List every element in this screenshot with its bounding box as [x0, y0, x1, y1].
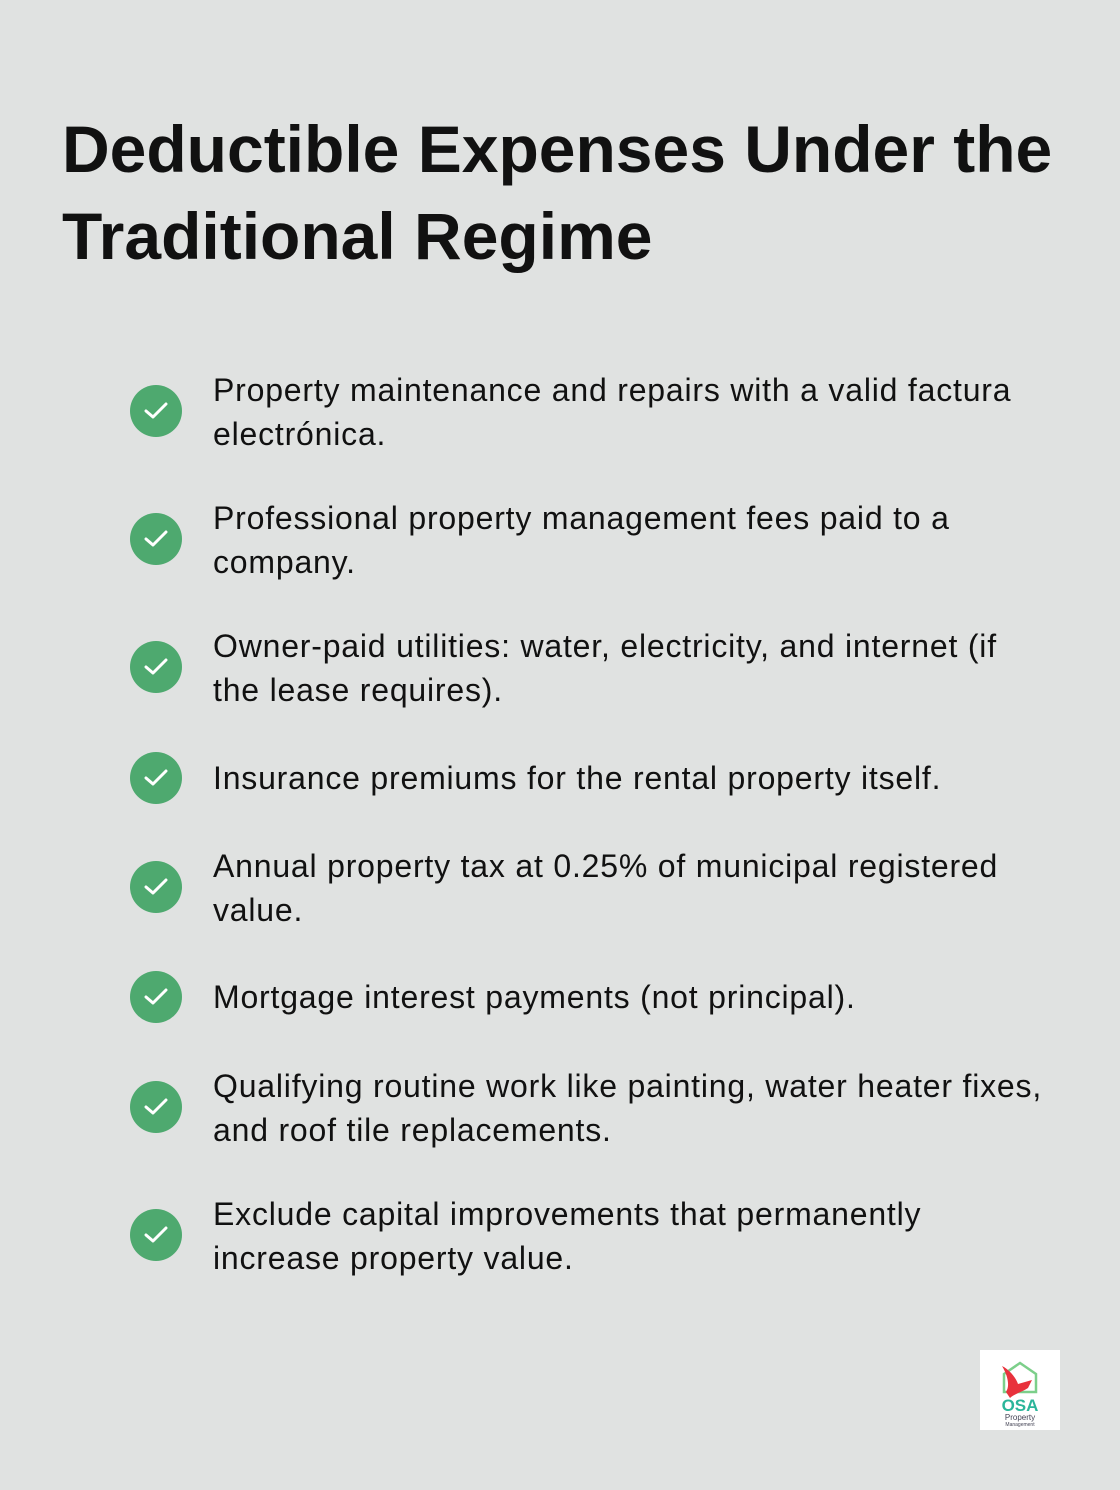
icon: check	[130, 752, 182, 804]
text	[213, 500, 950, 580]
item 6	[130, 971, 856, 1023]
text: Insurance premiums for the rental property itself.	[213, 760, 941, 796]
text: Property maintenance and repairs with a valid factura	[213, 372, 1011, 408]
icon: check	[130, 1081, 182, 1133]
icon: check	[130, 971, 182, 1023]
icon: check	[130, 513, 182, 565]
item 2	[130, 500, 950, 580]
text: and roof tile replacements.	[213, 1112, 612, 1148]
text	[213, 848, 998, 928]
logo: OSA	[1002, 1396, 1038, 1415]
item 8	[130, 1196, 921, 1276]
text	[213, 1068, 1042, 1148]
logo	[980, 1350, 1060, 1430]
item 3	[130, 628, 997, 708]
icon: check	[130, 861, 182, 913]
text: Qualifying routine work like painting, water heater fixes,	[213, 1068, 1042, 1104]
text: electrónica.	[213, 416, 386, 452]
text: the lease requires).	[213, 672, 503, 708]
text: increase property value.	[213, 1240, 574, 1276]
text: Mortgage interest payments (not principal).	[213, 979, 856, 1015]
text	[213, 1196, 921, 1276]
title: Traditional Regime	[62, 199, 652, 273]
text	[213, 372, 1011, 452]
text: Professional property management fees paid to a	[213, 500, 950, 536]
text: Owner-paid utilities: water, electricity, and internet (if	[213, 628, 997, 664]
item 7	[130, 1068, 1042, 1148]
item 1	[130, 372, 1011, 452]
text: value.	[213, 892, 303, 928]
item 5	[130, 848, 998, 928]
text: Annual property tax at 0.25% of municipal registered	[213, 848, 998, 884]
item 4	[130, 752, 941, 804]
title: Deductible Expenses Under the	[62, 112, 1052, 186]
text: company.	[213, 544, 356, 580]
logo: Property	[1005, 1413, 1035, 1422]
text: Exclude capital improvements that permanently	[213, 1196, 921, 1232]
icon: check	[130, 385, 182, 437]
logo: Management	[1005, 1422, 1035, 1428]
icon: check	[130, 1209, 182, 1261]
title	[62, 112, 1052, 273]
text	[213, 628, 997, 708]
icon: check	[130, 641, 182, 693]
